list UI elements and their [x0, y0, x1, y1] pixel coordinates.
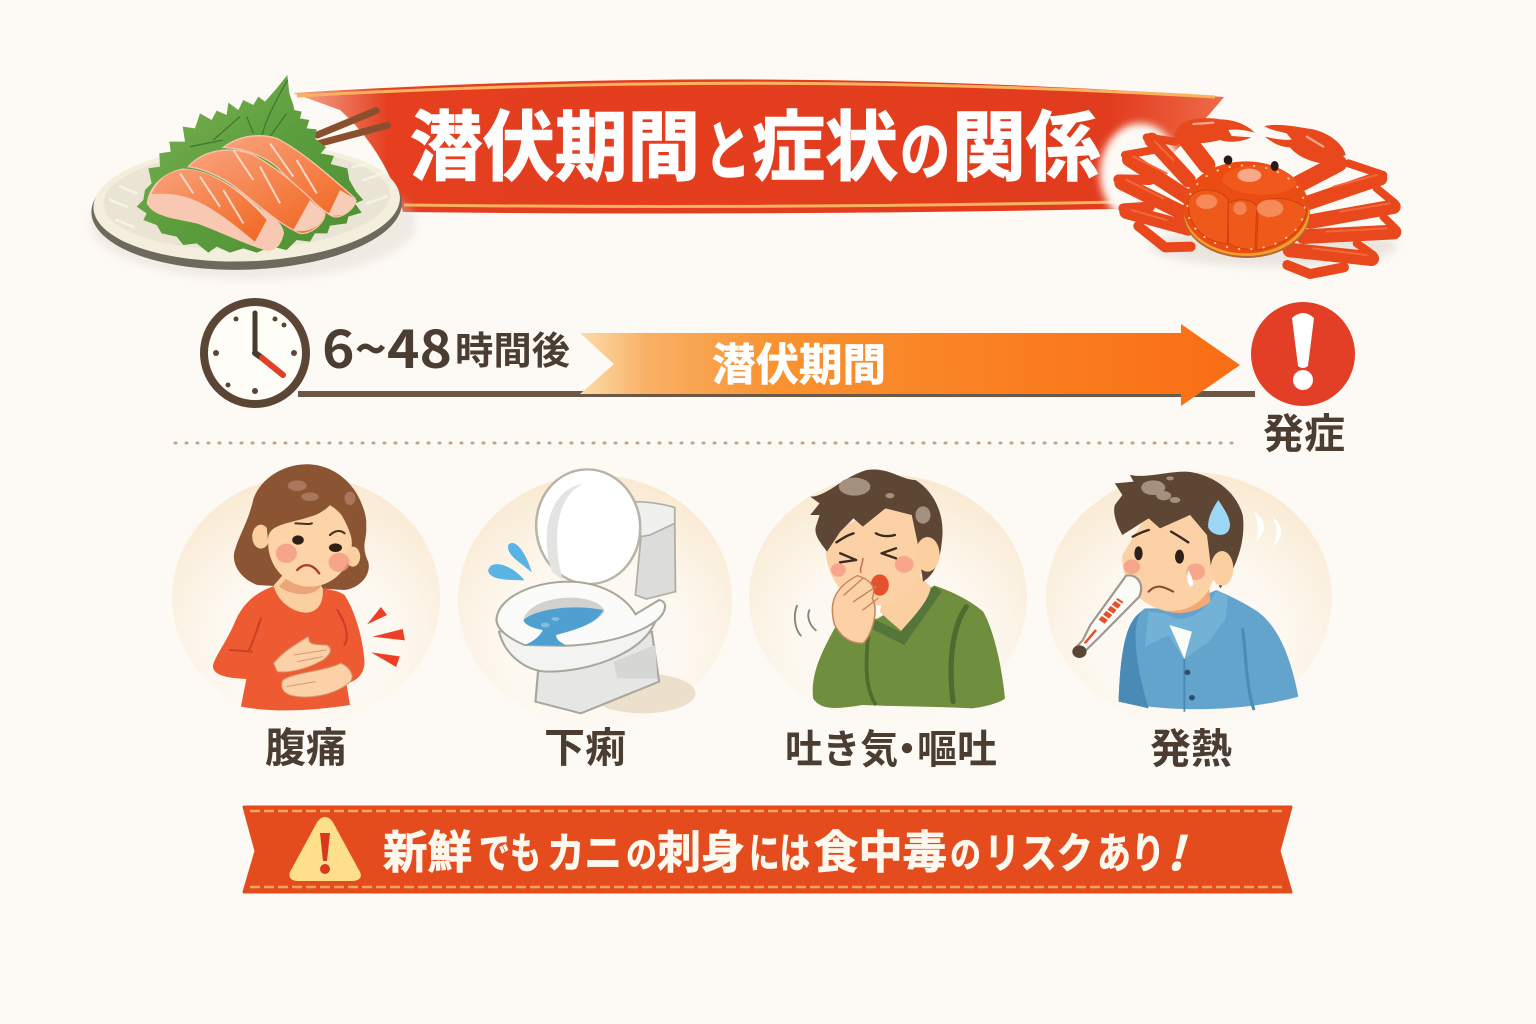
symptom: nausea and vomiting	[749, 469, 1027, 721]
symptom label: fever: 発熱	[1150, 715, 1232, 775]
symptom label: nausea and vomiting: ・	[887, 717, 927, 775]
arrow label: 潜伏期間	[712, 329, 886, 393]
symptom: toilet	[458, 467, 732, 725]
warning text: 新鮮	[383, 816, 472, 881]
warning text: でも	[479, 820, 541, 881]
warning text: !	[1167, 818, 1188, 884]
warning banner	[244, 807, 1291, 892]
crab claws	[1176, 118, 1255, 143]
symptom: abdominal pain	[172, 464, 440, 720]
title text: 潜伏期間	[410, 86, 700, 196]
title text	[410, 86, 1100, 196]
crab eyes	[1224, 155, 1279, 171]
time label	[322, 308, 570, 383]
symptom label: diarrhea: 下痢	[544, 714, 626, 774]
symptom label: nausea and vomiting: 嘔吐	[917, 717, 997, 775]
warning text: リスク	[984, 820, 1093, 881]
warning text: には	[749, 820, 810, 881]
title text: の	[900, 101, 950, 193]
title text: 症状	[752, 86, 898, 196]
chopsticks	[317, 111, 387, 144]
warning text	[383, 816, 1188, 884]
warning triangle icon	[289, 817, 361, 881]
salmon slice front	[147, 168, 284, 251]
symptom label: nausea and vomiting	[785, 717, 997, 775]
symptom: fever	[1046, 472, 1332, 724]
incubation arrow	[580, 324, 1240, 406]
time label: 時間後	[455, 320, 570, 375]
leg highlights	[1127, 142, 1390, 255]
clock icon	[204, 302, 306, 404]
icon: onset alert	[1251, 302, 1355, 406]
warning text: あり	[1097, 820, 1165, 881]
warning text: の	[626, 826, 657, 878]
illustration: red crab	[1100, 118, 1397, 274]
warning text: の	[950, 826, 981, 878]
crab body	[1183, 170, 1310, 258]
onset label: 発症	[1263, 400, 1345, 460]
timeline line	[298, 391, 1255, 397]
title ribbon	[293, 79, 1224, 213]
shiso leaf	[137, 75, 363, 253]
illustration: sashimi plate	[89, 75, 417, 280]
symptom label: abdominal pain: 腹痛	[265, 714, 347, 774]
symptom label: nausea and vomiting: 吐き気	[785, 717, 898, 775]
title text: と	[705, 101, 750, 193]
salmon slice middle	[188, 150, 325, 233]
title text: 関係	[952, 86, 1100, 196]
crab legs	[1118, 135, 1395, 274]
time label: 6~48	[322, 308, 452, 383]
warning text: カニ	[547, 820, 622, 881]
warning text: 食中毒	[814, 816, 947, 881]
warning text: 刺身	[657, 816, 745, 881]
salmon slice back	[223, 136, 355, 217]
